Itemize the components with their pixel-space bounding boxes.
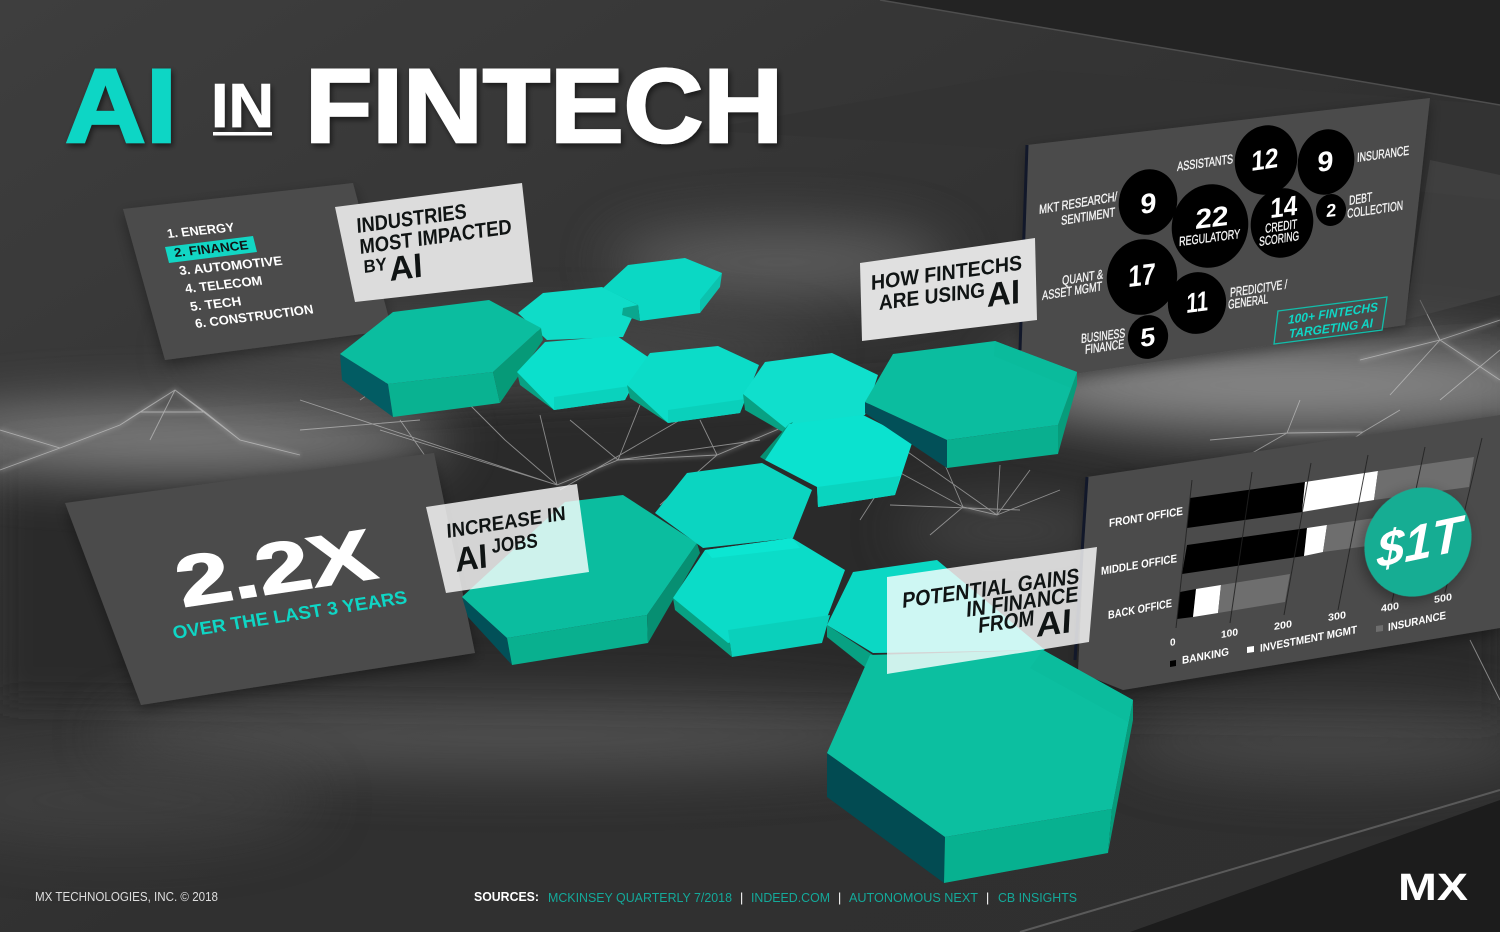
footer: sources: AUTONOMOUS NEXT: [849, 891, 978, 905]
bubble labels: FINANCE: [1085, 336, 1125, 357]
footer: sources: [474, 890, 1077, 905]
hex: center upper: [655, 463, 812, 548]
bubble labels: QUANT &: [1062, 266, 1104, 288]
bubble labels: REGULATORY: [1179, 226, 1241, 249]
bubble cluster: 9: [1140, 187, 1157, 220]
axis labels: 400: [1381, 601, 1399, 615]
hex: left large: [340, 300, 543, 417]
row labels: MIDDLE OFFICE: [1101, 553, 1177, 578]
label: potential gains in finance: IN FINANCE: [966, 581, 1079, 622]
bubble labels: BUSINESS: [1081, 325, 1126, 346]
label: industries most impacted: AI: [388, 247, 423, 289]
panel: 2.2X stat: [65, 453, 475, 705]
hex: center right cyan: [760, 415, 913, 507]
hex: center large: [462, 495, 700, 665]
bubble labels: INSURANCE: [1357, 143, 1410, 165]
bubble labels: PREDICITVE /: [1230, 276, 1288, 300]
list of industries: 3. AUTOMOTIVE: [178, 254, 284, 278]
callout: 100+ fintechs: [1274, 297, 1387, 344]
hex: center lower: [673, 538, 845, 657]
panel: how fintechs use AI: [1020, 98, 1500, 382]
title: [65, 48, 783, 165]
stat caption: OVER THE LAST 3 YEARS: [171, 586, 409, 643]
label: how fintechs are using AI: ARE USING: [879, 279, 985, 315]
hex: lower cyan: [517, 336, 648, 410]
list of industries: 4. TELECOM: [184, 274, 264, 296]
hex: bottom right large: [827, 650, 1133, 883]
title: FINTECH: [305, 48, 783, 165]
hex: upper cyan: [518, 287, 638, 340]
label: how fintechs are using AI: HOW FINTECHS: [871, 252, 1022, 295]
bubble labels: CREDIT: [1265, 216, 1297, 236]
bubble labels: SENTIMENT: [1061, 204, 1115, 228]
label: potential gains in finance: POTENTIAL GAINS: [902, 563, 1080, 613]
panel: potential gains chart: [1075, 415, 1500, 690]
title: IN: [211, 72, 274, 141]
axis labels: 0: [1170, 637, 1176, 649]
bubble labels: GENERAL: [1228, 291, 1268, 312]
bubble cluster: 5: [1140, 321, 1156, 353]
bubble cluster: 22: [1195, 200, 1229, 235]
label: potential gains in finance: FROM: [978, 605, 1035, 638]
hex: top right cyan: [603, 258, 722, 321]
axis labels: 100: [1221, 627, 1238, 641]
bubble labels: COLLECTION: [1347, 198, 1403, 221]
row labels: FRONT OFFICE: [1109, 506, 1183, 530]
title: AI: [65, 48, 177, 165]
callout: $1T: $1T: [1376, 504, 1466, 579]
label: how fintechs are using AI: [860, 238, 1037, 341]
bubble labels: SCORING: [1259, 228, 1299, 249]
hexagon cluster: [340, 258, 1133, 883]
callout: 100+ fintechs: TARGETING AI: [1289, 316, 1373, 341]
axis labels: 200: [1274, 619, 1292, 633]
stat value: 2.2X: [167, 515, 383, 623]
axis labels: 500: [1434, 592, 1452, 606]
footer: sources: |: [838, 891, 841, 905]
hex: middle cyan: [627, 346, 759, 423]
logo: MX: MX: [1398, 867, 1469, 909]
bubble cluster: 9: [1317, 145, 1334, 178]
bubble labels: MKT RESEARCH/: [1039, 189, 1118, 217]
label: increase in AI jobs: INCREASE IN: [446, 503, 566, 543]
bubble cluster: 14: [1270, 190, 1298, 224]
hex: bottom right small: [827, 560, 1045, 668]
bubble cluster: 17: [1128, 258, 1156, 294]
hex: right large: [865, 341, 1077, 468]
label: industries most impacted: INDUSTRIES: [356, 200, 467, 238]
legend: INSURANCE: [1388, 610, 1446, 634]
hex: upper center cyan: [743, 353, 878, 435]
label: potential gains in finance: AI: [1036, 602, 1072, 645]
bubble labels: [1039, 143, 1410, 357]
list of industries: 2. FINANCE: [173, 238, 250, 260]
row labels: [1101, 506, 1183, 622]
footer: copyright: MX TECHNOLOGIES, INC. © 2018: [35, 890, 218, 904]
list of industries: 1. ENERGY: [166, 220, 236, 241]
bubble labels: ASSISTANTS: [1177, 151, 1234, 174]
callout: $1T: [1342, 466, 1494, 618]
legend: INVESTMENT MGMT: [1260, 624, 1357, 655]
footer: sources: MCKINSEY QUARTERLY 7/2018: [548, 891, 732, 905]
label: industries most impacted: MOST IMPACTED: [359, 216, 512, 259]
label: industries most impacted: BY: [363, 254, 387, 277]
bubble labels: DEBT: [1349, 189, 1372, 208]
label: industries most impacted: [335, 183, 533, 302]
footer: sources: |: [986, 891, 989, 905]
panel: industries list: [123, 183, 392, 360]
footer: sources: |: [740, 891, 743, 905]
label: increase in AI jobs: AI: [454, 537, 488, 580]
network lines: [0, 300, 1500, 700]
bubble cluster: 12: [1251, 142, 1279, 177]
bubble cluster: [1098, 118, 1362, 363]
axis labels: 300: [1328, 610, 1346, 624]
label: increase in AI jobs: JOBS: [491, 530, 538, 558]
finance highlight: [165, 236, 257, 263]
bubble labels: ASSET MGMT: [1042, 278, 1102, 303]
callout: 100+ fintechs: 100+ FINTECHS: [1288, 300, 1379, 327]
footer: sources: INDEED.COM: [751, 891, 830, 905]
list of industries: 5. TECH: [189, 294, 243, 314]
axis labels: [1170, 592, 1452, 649]
legend: [1170, 610, 1446, 667]
list of industries: 6. CONSTRUCTION: [194, 302, 315, 331]
legend: BANKING: [1182, 646, 1229, 667]
bubble cluster: 2: [1326, 200, 1337, 221]
label: potential gains in finance: [887, 547, 1097, 674]
footer: sources: SOURCES:: [474, 890, 539, 904]
label: how fintechs are using AI: AI: [987, 273, 1020, 315]
bubble cluster: 11: [1186, 285, 1209, 319]
label: increase in AI jobs: [426, 484, 589, 593]
row labels: BACK OFFICE: [1108, 597, 1172, 622]
stacked bar chart: [1176, 438, 1482, 628]
footer: sources: CB INSIGHTS: [998, 891, 1077, 905]
list of industries: [166, 220, 315, 331]
